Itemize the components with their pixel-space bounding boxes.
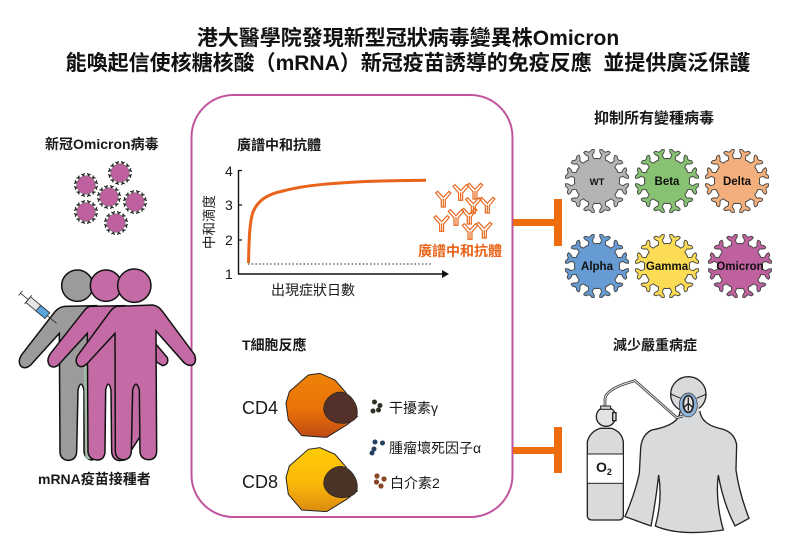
icon: patient with oxygen — [587, 377, 749, 533]
T cell: CD4: CD4 — [242, 398, 278, 418]
heading: inhibit all variants: 抑制所有變種病毒 — [594, 109, 714, 127]
arrow: inhibition to variants — [513, 199, 562, 246]
icon: Delta virus: Delta — [723, 176, 752, 188]
icon: Gamma virus: Gamma — [646, 261, 689, 273]
icon: WT virus — [565, 149, 629, 213]
tick labels: 4 — [225, 163, 233, 179]
heading: reduce severe disease: 減少嚴重病症 — [613, 337, 697, 353]
cytokine: interferon gamma: 干擾素γ — [389, 400, 438, 416]
icon: WT virus: WT — [590, 177, 605, 188]
label: antibodies: 廣譜中和抗體 — [418, 243, 502, 259]
title — [66, 26, 750, 75]
person: front — [76, 269, 195, 460]
person: gray — [19, 270, 97, 460]
title: 港大醫學院發現新型冠狀病毒變異株Omicron — [197, 26, 619, 50]
label: oxygen O2: O — [596, 459, 607, 475]
label: vaccine recipients: mRNA疫苗接種者 — [38, 471, 151, 487]
icon: Delta virus — [705, 149, 769, 213]
title: 能喚起信使核糖核酸（mRNA）新冠疫苗誘導的免疫反應 並提供廣泛保護 — [66, 51, 750, 75]
icon: syringe — [17, 289, 60, 328]
heading: Omicron virus: 新冠Omicron病毒 — [45, 136, 159, 152]
patient head — [671, 377, 706, 412]
heading: T cell response: T細胞反應 — [242, 337, 307, 353]
icon: Alpha virus: Alpha — [581, 261, 614, 273]
curve — [248, 180, 426, 263]
icon: Omicron virus — [708, 234, 772, 298]
T cell: CD8: CD8 — [242, 472, 278, 492]
icon: Beta virus — [635, 149, 699, 213]
panel: antibody and T-cell response — [192, 95, 512, 517]
tick labels — [225, 163, 233, 282]
icon: vaccinated people — [17, 269, 195, 461]
T cell: CD8 — [242, 448, 357, 512]
icon: antibodies — [434, 183, 495, 239]
cytokine: TNF alpha: 腫瘤壞死因子α — [389, 440, 481, 456]
y-axis title: 中和滴度 — [201, 195, 217, 249]
icon: Alpha virus — [565, 234, 629, 298]
tick labels: 2 — [225, 232, 233, 248]
chart: neutralizing titre curve — [201, 163, 449, 298]
tick labels: 3 — [225, 197, 233, 213]
oxygen tube — [605, 381, 683, 418]
arrow: inhibition to severe disease — [513, 427, 562, 473]
oxygen mask — [679, 393, 697, 417]
person: middle — [48, 270, 168, 461]
cytokine: interleukin 2 — [374, 473, 440, 491]
icon: Beta virus: Beta — [655, 176, 680, 188]
oxygen tank — [587, 428, 623, 520]
T cell: CD4 — [242, 373, 357, 437]
cytokine: interleukin 2: 白介素2 — [390, 475, 440, 491]
tick labels: 1 — [225, 266, 233, 282]
threshold line — [248, 263, 433, 265]
label: oxygen O2: 2 — [607, 467, 612, 477]
icon: Omicron virus particles — [74, 161, 147, 235]
chart axes — [238, 170, 442, 274]
icon: Gamma virus — [635, 234, 699, 298]
heading: broad neutralizing antibodies: 廣譜中和抗體 — [237, 137, 321, 153]
icon: Omicron virus: Omicron — [716, 261, 764, 273]
x-axis title: 出現症狀日數 — [271, 282, 355, 298]
patient body — [625, 412, 749, 533]
